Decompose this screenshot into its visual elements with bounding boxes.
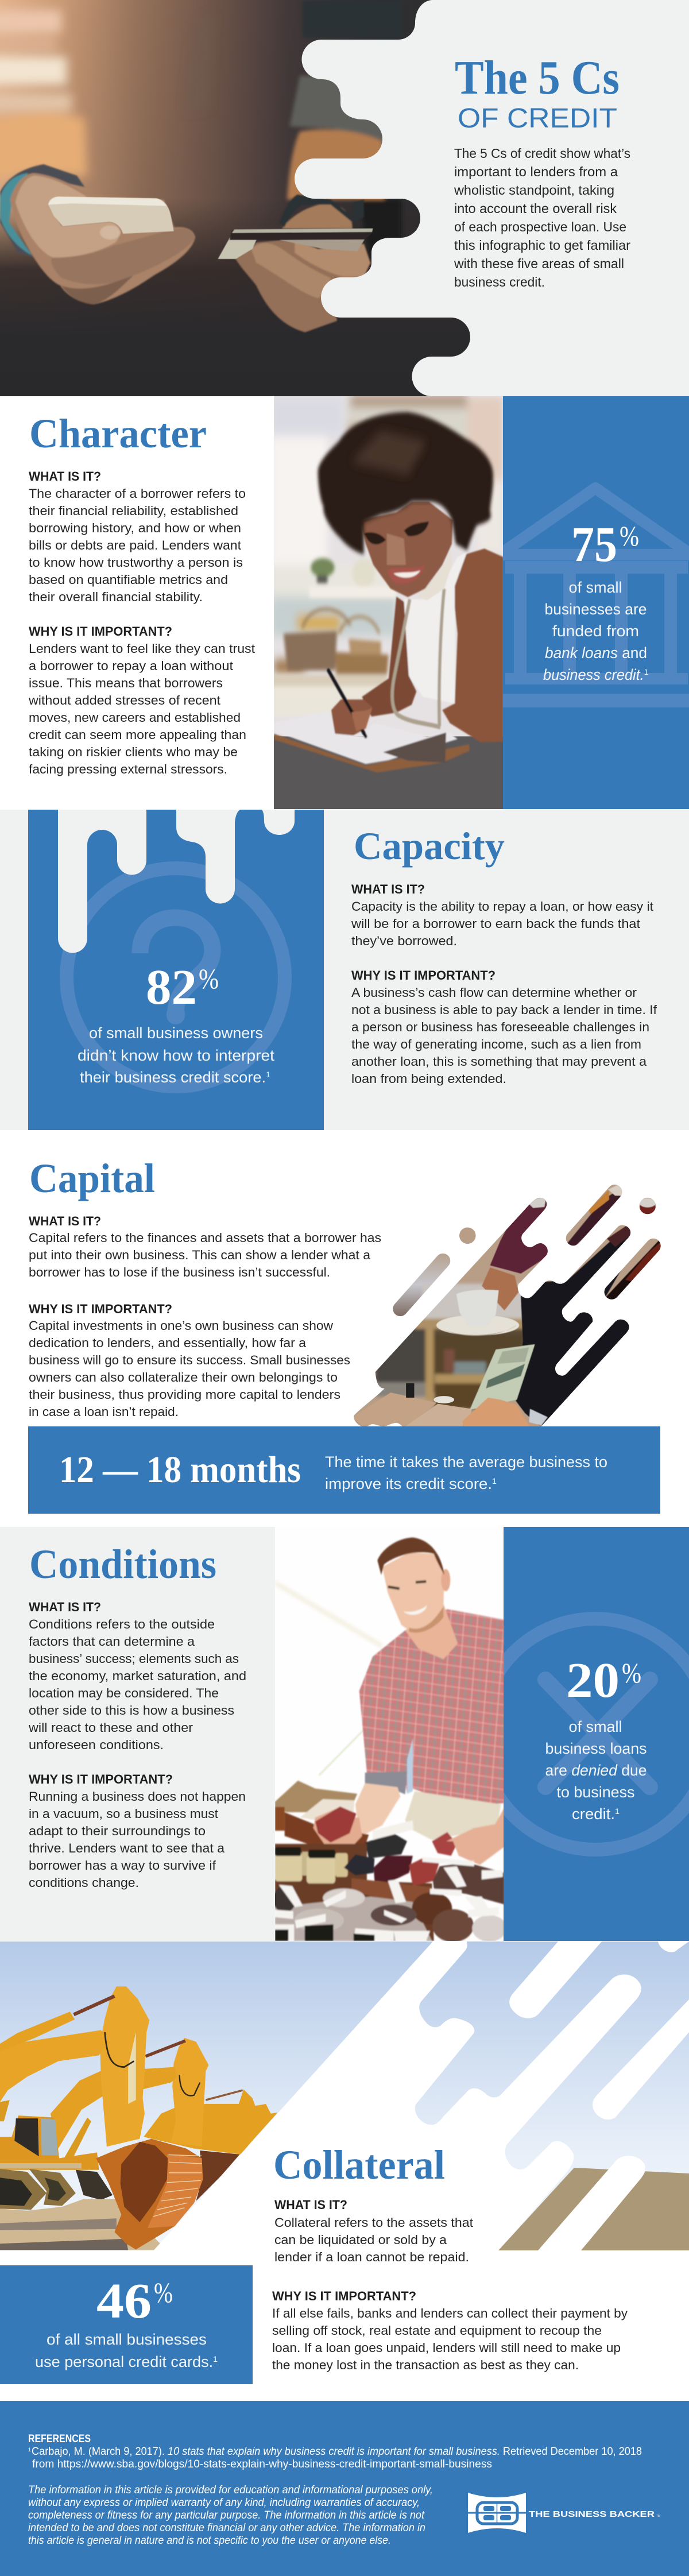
- text block: 82 percent caption: their business credit score.: [80, 1069, 264, 1086]
- text block: what is it: [274, 2198, 473, 2264]
- text block: what is it: their overall financial stability.: [29, 590, 203, 604]
- text block: what is it: based on quantifiable metrics and: [29, 573, 228, 587]
- text block: 20 percent caption: business loans: [545, 1740, 647, 1757]
- text block: why is it important: [29, 1772, 246, 1890]
- text block: references: REFERENCES: [28, 2433, 91, 2445]
- logo: the business backer: TM: [656, 2515, 660, 2518]
- text block: 20 percent caption: of small: [568, 1718, 622, 1735]
- text block: what is it: WHAT IS IT?: [29, 469, 101, 484]
- text block: disclaimer: this article is general in nature and is not specific to you the user or anyone else.: [28, 2535, 391, 2547]
- heading: capital: Capital: [29, 1155, 155, 1201]
- text block: what is it: Conditions refers to the outside: [29, 1617, 215, 1631]
- text block: why is it important: A business’s cash flow can determine whether or: [351, 985, 637, 1000]
- text block: why is it important: conditions change.: [29, 1875, 139, 1890]
- statistic: 75 percent: 75: [571, 516, 617, 572]
- text block: why is it important: in case a loan isn’t repaid.: [29, 1405, 179, 1419]
- statistic: 46 percent: %: [154, 2276, 173, 2308]
- text block: why is it important: loan. If a loan goes unpaid, lenders will still need to make up: [272, 2341, 621, 2355]
- text block: time to improve credit score: 1: [492, 1476, 497, 1486]
- stat panel: 46%: [0, 2265, 253, 2384]
- text block: 20 percent caption: to business: [557, 1784, 635, 1801]
- photo: hands holding phone and credit card: [0, 0, 470, 396]
- text block: what is it: factors that can determine a: [29, 1634, 195, 1649]
- text block: time to improve credit score: [325, 1453, 607, 1492]
- text block: what is it: WHAT IS IT?: [29, 1214, 101, 1228]
- text block: what is it: Capital refers to the finances and assets that a borrower has: [29, 1231, 381, 1245]
- text block: references: 1: [28, 2447, 31, 2453]
- text block: why is it important: taking on riskier clients who may be: [29, 745, 238, 759]
- logo: the business backer: THE BUSINESS BACKER: [529, 2509, 655, 2519]
- stat panel: 82%: [28, 810, 324, 1130]
- text block: why is it important: without added stresses of recent: [28, 693, 220, 707]
- text block: why is it important: Running a business does not happen: [29, 1789, 246, 1804]
- text block: why is it important: borrower has a way to survive if: [29, 1858, 216, 1873]
- text block: why is it important: the way of generating income, such as a lien from: [351, 1037, 641, 1051]
- text block: why is it important: another loan, this is something that may prevent a: [351, 1054, 647, 1069]
- text block: why is it important: [28, 624, 255, 776]
- text block: what is it: other side to this is how a business: [29, 1703, 234, 1718]
- text block: what is it: [29, 1214, 381, 1279]
- heading: collateral: Collateral: [273, 2142, 445, 2188]
- text block: why is it important: WHY IS IT IMPORTANT?: [29, 624, 172, 639]
- text block: intro: wholistic standpoint, taking: [454, 183, 614, 198]
- panel: collateral: [0, 1941, 689, 2384]
- text block: what is it: bills or debts are paid. Lenders want: [29, 538, 241, 552]
- text block: why is it important: [351, 968, 657, 1086]
- statistic: 12 to 18 months: 12 — 18 months: [59, 1449, 301, 1491]
- text block: what is it: put into their own business. This can show a lender what a: [29, 1248, 371, 1262]
- panel: conditions: [0, 1526, 689, 1942]
- text block: why is it important: a borrower to repay a loan without: [29, 659, 233, 673]
- text block: 46 percent caption: use personal credit cards.: [35, 2353, 212, 2370]
- text block: 75 percent caption: bank loans and: [545, 644, 647, 662]
- text block: disclaimer: The information in this article is provided for education and informational purposes only,: [28, 2484, 433, 2496]
- text block: references: [28, 2433, 642, 2470]
- text block: what is it: The character of a borrower refers to: [29, 486, 246, 501]
- text block: 20 percent caption: are denied due: [545, 1762, 647, 1779]
- text block: what is it: they’ve borrowed.: [351, 934, 457, 948]
- text block: what is it: will be for a borrower to earn back the funds that: [351, 916, 640, 931]
- text block: 75 percent caption: [543, 579, 648, 683]
- text block: 20 percent caption: [545, 1718, 647, 1823]
- text block: why is it important: WHY IS IT IMPORTANT?: [351, 968, 496, 983]
- text block: what is it: will react to these and other: [28, 1720, 193, 1735]
- statistic: 82 percent: 82: [146, 959, 197, 1015]
- text block: why is it important: loan from being extended.: [351, 1072, 506, 1086]
- text block: why is it important: credit can seem more appealing than: [29, 728, 246, 742]
- text block: why is it important: [29, 1302, 350, 1419]
- text block: why is it important: WHY IS IT IMPORTANT?: [29, 1772, 173, 1786]
- text block: why is it important: in a vacuum, so a business must: [29, 1807, 218, 1821]
- text block: why is it important: WHY IS IT IMPORTANT?: [272, 2289, 416, 2303]
- statistic: 82 percent: %: [199, 962, 219, 995]
- text block: time to improve credit score: The time it takes the average business to: [325, 1453, 607, 1471]
- text block: 75 percent caption: business credit.: [543, 666, 644, 683]
- text block: what is it: borrowing history, and how or when: [29, 521, 241, 535]
- text block: what is it: can be liquidated or sold by a: [274, 2233, 447, 2247]
- logo: the business backer: [468, 2493, 660, 2533]
- statistic: 20 percent: 20: [566, 1652, 620, 1708]
- icon: bank: [500, 488, 689, 701]
- text block: time to improve credit score: improve its credit score.: [325, 1475, 489, 1492]
- text block: why is it important: facing pressing external stressors.: [29, 762, 227, 776]
- text block: 20 percent caption: 1: [615, 1807, 620, 1816]
- panel: capital: [28, 1155, 666, 1514]
- text block: intro: [454, 146, 630, 289]
- text block: why is it important: moves, new careers and established: [29, 710, 241, 725]
- heading: capacity: Capacity: [354, 824, 505, 868]
- text block: intro: business credit.: [454, 274, 545, 289]
- panel: capacity: [0, 810, 689, 1130]
- text block: 46 percent caption: [35, 2331, 218, 2370]
- statistic: 75 percent: %: [620, 520, 639, 552]
- text block: 82 percent caption: [78, 1024, 275, 1086]
- text block: what is it: lender if a loan cannot be repaid.: [274, 2250, 469, 2264]
- text block: what is it: [351, 882, 653, 948]
- stat panel: 75%: [500, 396, 689, 809]
- text block: why is it important: dedication to lenders, and essentially, how far a: [29, 1336, 307, 1350]
- text block: what is it: WHAT IS IT?: [274, 2198, 347, 2212]
- text block: 82 percent caption: 1: [266, 1070, 270, 1079]
- text block: 82 percent caption: didn’t know how to interpret: [78, 1047, 275, 1064]
- blob panel background: [295, 0, 689, 396]
- photo: woman writing on clipboard: [270, 396, 504, 810]
- title: The 5 Cs: [455, 51, 620, 105]
- text block: 82 percent caption: of small business owners: [89, 1024, 263, 1042]
- text block: 75 percent caption: 1: [644, 667, 648, 676]
- text block: what is it: business’ success; elements such as: [29, 1651, 239, 1666]
- text block: why is it important: Capital investments in one’s own business can show: [29, 1318, 333, 1333]
- text block: 75 percent caption: businesses are: [544, 601, 647, 618]
- text block: why is it important: a person or business has foreseeable challenges in: [351, 1020, 649, 1034]
- text block: references: from https://www.sba.gov/blogs/10-stats-explain-why-business-credit-important-small-business: [32, 2458, 492, 2470]
- text block: 46 percent caption: of all small businesses: [47, 2331, 207, 2348]
- text block: why is it important: their business, thus providing more capital to lenders: [29, 1387, 340, 1402]
- text block: why is it important: selling off stock, real estate and equipment to recoup the: [272, 2323, 602, 2338]
- text block: 75 percent caption: of small: [568, 579, 622, 596]
- text block: what is it: borrower has to lose if the business isn’t successful.: [29, 1265, 330, 1279]
- text block: why is it important: adapt to their surroundings to: [29, 1824, 206, 1838]
- panel: character: [28, 396, 689, 810]
- statistic: 46 percent: 46: [96, 2273, 152, 2329]
- statistic: 20 percent: [566, 1652, 641, 1708]
- text block: why is it important: Lenders want to feel like they can trust: [29, 641, 255, 656]
- text block: what is it: WHAT IS IT?: [351, 882, 425, 896]
- icon: x in circle: [480, 1619, 689, 1850]
- photo: excavators with sky and sand, diagonal drip crop: [0, 1941, 689, 2250]
- text block: disclaimer: [28, 2484, 433, 2547]
- text block: what is it: Collateral refers to the assets that: [274, 2215, 473, 2230]
- text block: what is it: WHAT IS IT?: [29, 1600, 101, 1614]
- panel: hero: [0, 0, 689, 396]
- text block: disclaimer: without any express or implied warranty of any kind, including warranties of accuracy,: [28, 2497, 420, 2509]
- panel: footer: [0, 2401, 689, 2576]
- stat panel: 20%: [504, 1527, 689, 1941]
- text block: why is it important: the money lost in the transaction as best as they can.: [272, 2358, 579, 2372]
- text block: what is it: to know how trustworthy a person is: [29, 555, 243, 570]
- text block: why is it important: If all else fails, banks and lenders can collect their payment by: [272, 2306, 628, 2320]
- photo: paying with cash at cafe, diagonal drip crop: [354, 1184, 661, 1426]
- title: OF CREDIT: [458, 103, 617, 134]
- text block: what is it: location may be considered. The: [29, 1686, 219, 1700]
- text block: intro: of each prospective loan. Use: [454, 219, 626, 234]
- text block: 46 percent caption: 1: [213, 2354, 218, 2364]
- text block: what is it: [28, 1600, 246, 1752]
- text block: intro: important to lenders from a: [454, 164, 618, 179]
- statistic: 20 percent: %: [622, 1657, 641, 1689]
- text block: what is it: [29, 469, 246, 604]
- text block: why is it important: issue. This means that borrowers: [29, 676, 223, 690]
- text block: disclaimer: intended to be and does not constitute financial or any other advice. The information in: [28, 2522, 425, 2534]
- text block: intro: this infographic to get familiar: [454, 238, 630, 253]
- text block: why is it important: WHY IS IT IMPORTANT?: [29, 1302, 172, 1316]
- text block: intro: into account the overall risk: [454, 201, 617, 216]
- white drip cap, top right: [658, 1941, 689, 1952]
- statistic: 82 percent: [146, 959, 219, 1015]
- text block: why is it important: owners can also collateralize their own belongings to: [29, 1370, 338, 1384]
- drips: [58, 810, 295, 953]
- statistic: 46 percent: [96, 2273, 173, 2329]
- text block: what is it: unforeseen conditions.: [29, 1738, 164, 1752]
- text block: what is it: their financial reliability, established: [29, 504, 238, 518]
- text block: references: Carbajo, M. (March 9, 2017). 10 stats that explain why business credit is important for small business. Retrieved December 10, 2018: [32, 2446, 642, 2458]
- text block: disclaimer: completeness or fitness for any particular purpose. The information in this article is not: [28, 2509, 425, 2521]
- heading: conditions: Conditions: [29, 1541, 216, 1587]
- text block: why is it important: [272, 2289, 628, 2372]
- photo: market vendor with goods: [273, 1526, 506, 1942]
- text block: why is it important: business will go to ensure its success. Small businesses: [29, 1353, 350, 1367]
- title: [455, 51, 620, 134]
- text block: 75 percent caption: funded from: [552, 622, 639, 640]
- icon: question mark in circle: [67, 868, 285, 1086]
- text block: intro: with these five areas of small: [454, 256, 624, 271]
- heading: character: Character: [29, 411, 207, 457]
- text block: why is it important: not a business is able to pay back a lender in time. If: [351, 1003, 657, 1017]
- text block: intro: The 5 Cs of credit show what’s: [454, 146, 630, 161]
- text block: 20 percent caption: credit.: [572, 1805, 614, 1823]
- text block: what is it: the economy, market saturation, and: [29, 1669, 246, 1683]
- text block: what is it: Capacity is the ability to repay a loan, or how easy it: [351, 899, 653, 914]
- stat band: 12-18 months: [28, 1426, 660, 1514]
- text block: why is it important: thrive. Lenders want to see that a: [29, 1841, 225, 1855]
